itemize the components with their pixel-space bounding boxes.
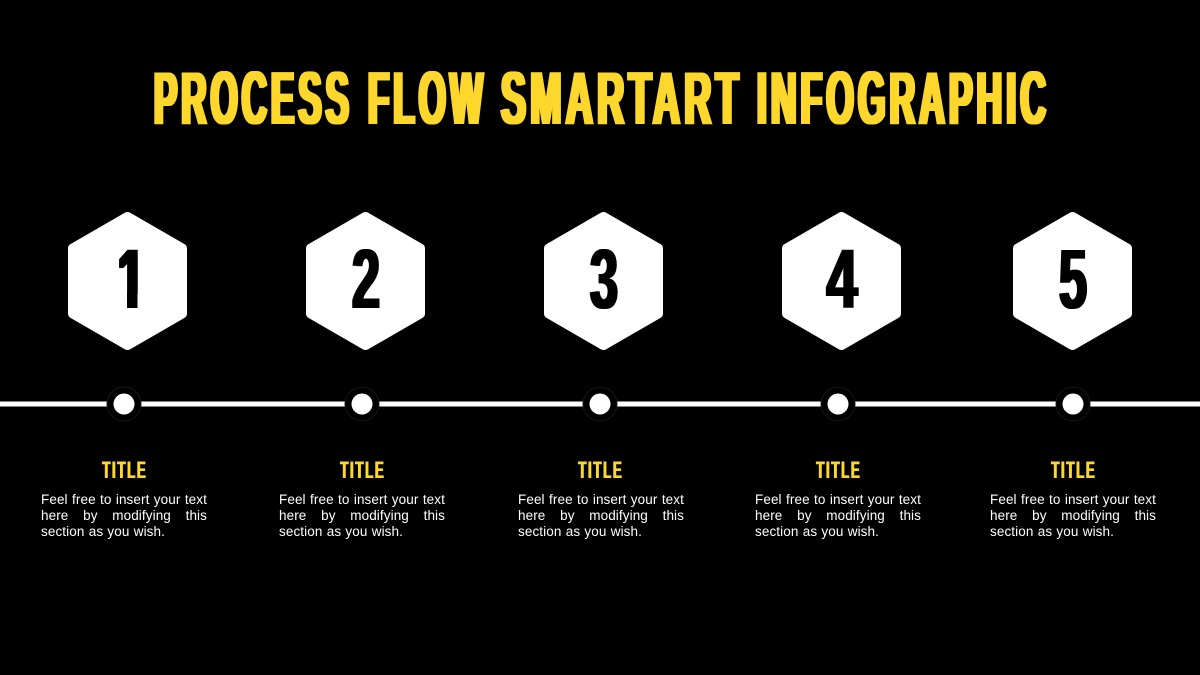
step 1 heading: TITLE: [102, 457, 147, 484]
step 3 hexagon: [549, 217, 658, 345]
title: SMARTART: [501, 56, 743, 140]
title: FLOW: [368, 56, 487, 140]
step 3 description: [518, 492, 684, 539]
step 3 description: Feel free to insert your text: [518, 492, 684, 507]
step 3 hexagon: 3: [590, 232, 618, 326]
step 2 hexagon: 2: [352, 232, 380, 326]
step 5 description: here by modifying this: [990, 508, 1156, 523]
step 2 description: section as you wish.: [279, 524, 403, 539]
title: [154, 56, 1050, 140]
step 1 description: [41, 492, 207, 539]
step 5 hexagon: 5: [1059, 232, 1087, 326]
step 5 description: [990, 492, 1156, 539]
timeline marker 5: [1056, 387, 1090, 421]
step 5 heading: TITLE: [1051, 457, 1096, 484]
step 2 description: Feel free to insert your text: [279, 492, 445, 507]
step 1 description: here by modifying this: [41, 508, 207, 523]
step 5 hexagon: [1018, 217, 1127, 345]
step 4 description: [755, 492, 921, 539]
title: PROCESS: [154, 56, 353, 140]
timeline marker 1: [107, 387, 141, 421]
step 4 heading: TITLE: [816, 457, 861, 484]
step 2 heading: TITLE: [340, 457, 385, 484]
step 3 description: here by modifying this: [518, 508, 684, 523]
step 3 heading: TITLE: [578, 457, 623, 484]
step 1 description: Feel free to insert your text: [41, 492, 207, 507]
timeline marker 2: [345, 387, 379, 421]
step 4 description: here by modifying this: [755, 508, 921, 523]
step 4 description: Feel free to insert your text: [755, 492, 921, 507]
step 5 description: section as you wish.: [990, 524, 1114, 539]
step 4 hexagon: [787, 217, 896, 345]
step 1 hexagon: [73, 217, 182, 345]
step 4 hexagon: 4: [826, 232, 858, 326]
step 2 hexagon: [311, 217, 420, 345]
timeline marker 4: [821, 387, 855, 421]
step 2 description: [279, 492, 445, 539]
step 4 description: section as you wish.: [755, 524, 879, 539]
timeline line: [0, 402, 1200, 406]
step 3 description: section as you wish.: [518, 524, 642, 539]
timeline marker 3: [583, 387, 617, 421]
step 2 description: here by modifying this: [279, 508, 445, 523]
step 5 description: Feel free to insert your text: [990, 492, 1156, 507]
step 1 hexagon: 1: [118, 232, 145, 326]
step 1 description: section as you wish.: [41, 524, 165, 539]
